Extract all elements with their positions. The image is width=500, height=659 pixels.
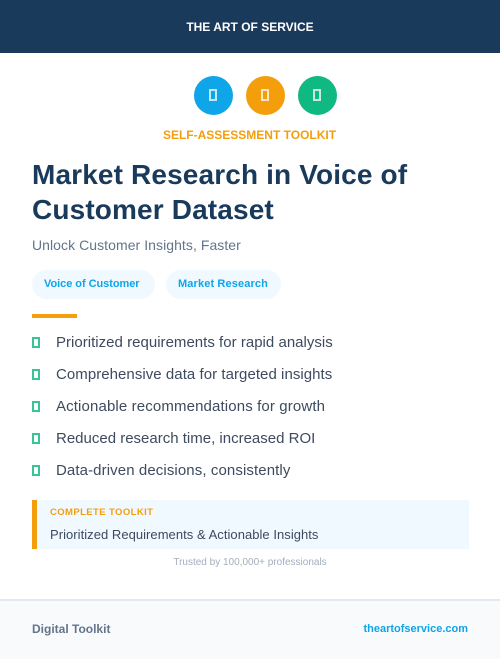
benefit 2: Comprehensive data for targeted insights xyxy=(56,366,332,383)
eyebrow label: SELF-ASSESSMENT TOOLKIT xyxy=(163,128,336,142)
callout text: Prioritized Requirements & Actionable Insights xyxy=(50,527,318,542)
icon: orange circle xyxy=(246,76,285,115)
title: Market Research in Voice of xyxy=(32,159,407,190)
subtitle: Unlock Customer Insights, Faster xyxy=(32,237,241,253)
header banner: THE ART OF SERVICE xyxy=(186,20,314,34)
icon: green circle xyxy=(298,76,337,115)
benefit 3: Actionable recommendations for growth xyxy=(56,398,325,415)
tag: Voice of Customer xyxy=(32,270,155,299)
tag: Voice of Customer: Voice of Customer xyxy=(44,278,140,290)
header banner xyxy=(0,0,500,53)
title xyxy=(32,159,408,225)
trust note: Trusted by 100,000+ professionals xyxy=(173,557,327,568)
tag: Market Research xyxy=(166,270,281,299)
footer link: theartofservice.com xyxy=(363,623,468,635)
bullet icon 5 xyxy=(32,465,40,476)
benefit 1: Prioritized requirements for rapid analysis xyxy=(56,334,333,351)
footer label: Digital Toolkit xyxy=(32,622,110,636)
bullet icon 4 xyxy=(32,433,40,444)
accent rule xyxy=(32,314,77,318)
bullet icon 2 xyxy=(32,369,40,380)
bullet icon 3 xyxy=(32,401,40,412)
title: Customer Dataset xyxy=(32,194,274,225)
callout label: COMPLETE TOOLKIT xyxy=(50,507,153,518)
benefit 4: Reduced research time, increased ROI xyxy=(56,430,315,447)
benefit 5: Data-driven decisions, consistently xyxy=(56,462,290,479)
callout panel xyxy=(32,500,469,549)
icon: blue circle xyxy=(194,76,233,115)
footer bar xyxy=(0,599,500,659)
tag: Market Research: Market Research xyxy=(178,278,268,290)
bullet icon 1 xyxy=(32,337,40,348)
